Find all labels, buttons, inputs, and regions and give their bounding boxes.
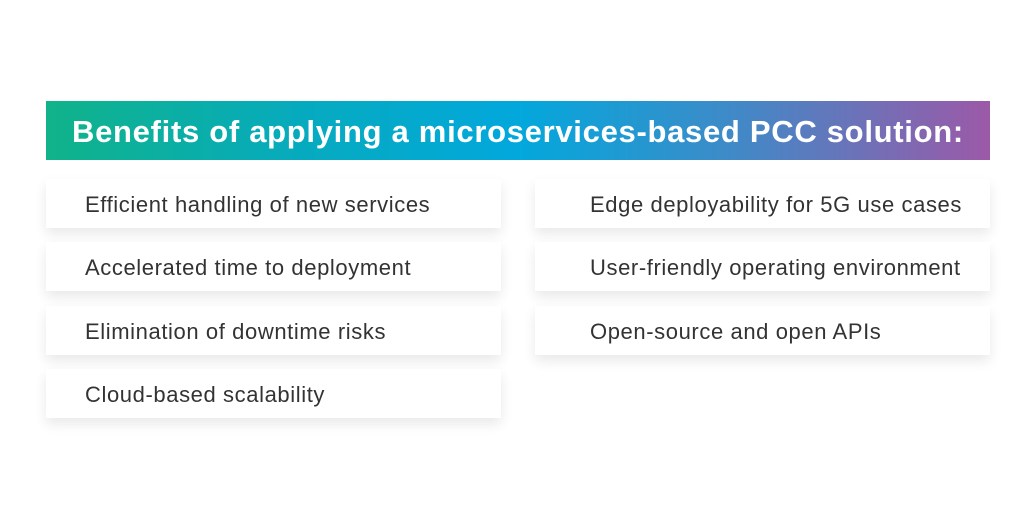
card: efficient handling: Efficient handling of new services [85,192,430,217]
card: downtime: Elimination of downtime risks [85,319,386,344]
card: cloud scalability: Cloud-based scalability [85,382,325,407]
card: open-source [535,306,990,355]
card: cloud scalability [46,369,501,418]
card: accelerated time: Accelerated time to deployment [85,255,411,280]
title banner [46,101,990,160]
card: edge deployability: Edge deployability for 5G use cases [590,192,962,217]
card: user-friendly: User-friendly operating environment [590,255,961,280]
card: downtime [46,306,501,355]
card: edge deployability [535,179,990,228]
card: open-source: Open-source and open APIs [590,319,881,344]
card: accelerated time [46,242,501,291]
card: user-friendly [535,242,990,291]
title banner: Benefits of applying a microservices-based PCC solution: [72,114,964,149]
card: efficient handling [46,179,501,228]
